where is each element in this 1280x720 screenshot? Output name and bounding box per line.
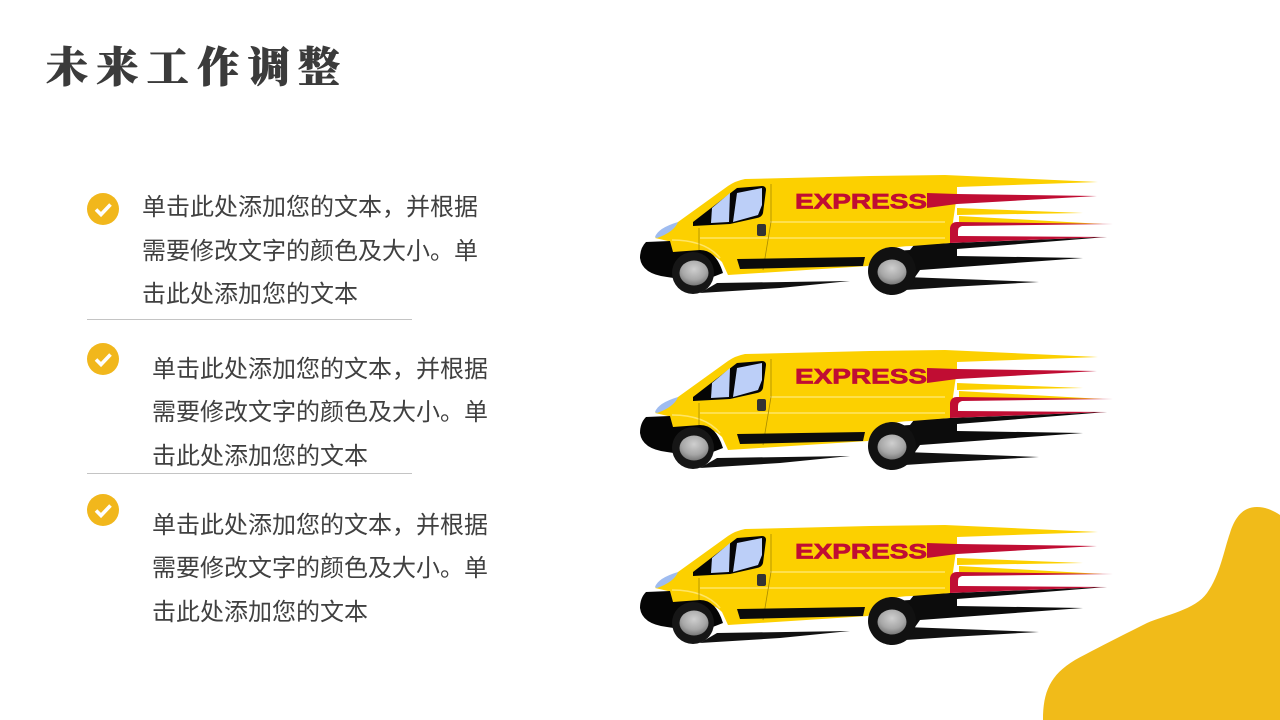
text block 1: 击此处添加您的文本 <box>142 281 358 308</box>
illustration: express van 2 <box>640 350 1112 470</box>
icon: check 2 <box>87 343 119 375</box>
text block 3 <box>152 512 488 626</box>
text block 3: 需要修改文字的颜色及大小。单 <box>152 555 488 582</box>
text block 1: 单击此处添加您的文本，并根据 <box>142 194 478 221</box>
text block 1 <box>142 194 478 308</box>
text block 2 <box>152 356 488 470</box>
text block 2: 需要修改文字的颜色及大小。单 <box>152 399 488 426</box>
decorative corner blob <box>1043 507 1280 720</box>
illustration: express van 1 <box>640 175 1112 295</box>
icon: check 1 <box>87 193 119 225</box>
text block 2: 击此处添加您的文本 <box>152 443 368 470</box>
text block 3: 单击此处添加您的文本，并根据 <box>152 512 488 539</box>
illustration: express van 2: EXPRESS <box>795 366 927 388</box>
illustration: express van 3: EXPRESS <box>795 540 927 564</box>
illustration: express van 1: EXPRESS <box>795 190 927 214</box>
text block 1: 需要修改文字的颜色及大小。单 <box>142 238 478 265</box>
illustration: express van 3 <box>640 525 1112 645</box>
title: 未来工作调整 <box>46 46 348 92</box>
text block 3: 击此处添加您的文本 <box>152 599 368 626</box>
icon: check 3 <box>87 494 119 526</box>
text block 2: 单击此处添加您的文本，并根据 <box>152 356 488 383</box>
